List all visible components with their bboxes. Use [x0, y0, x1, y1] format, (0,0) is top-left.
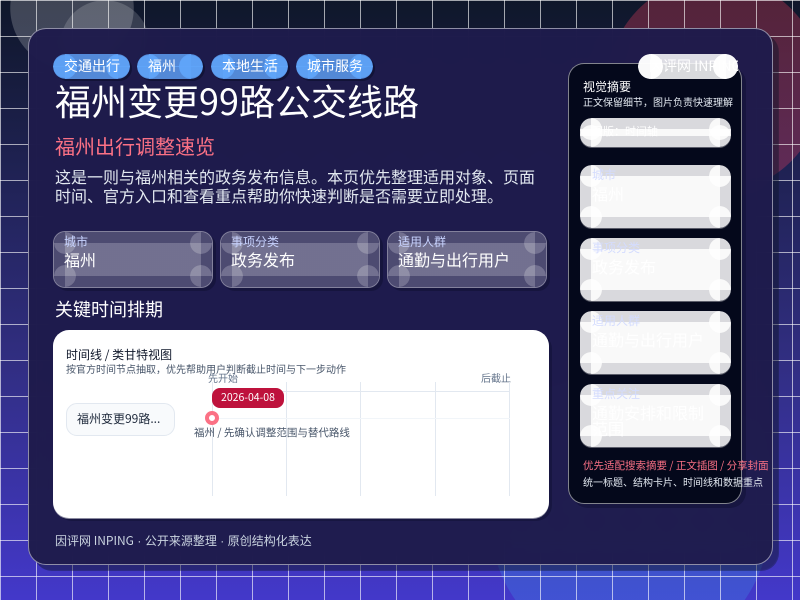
side panel: visual summary	[568, 63, 742, 504]
summary card: 时间轴	[580, 118, 731, 147]
section heading: 关键时间排期	[55, 296, 163, 322]
row label	[66, 403, 175, 436]
tag list	[53, 54, 375, 81]
date pill: 2026-04-08	[221, 390, 275, 405]
summary card: 城市: 福州	[592, 181, 624, 205]
summary card: 重点关注: 通勤安排和限制范围	[592, 400, 704, 440]
summary card: 时间轴: 图版：时间轴	[592, 123, 658, 139]
summary card: 适用人群: 适用人群	[592, 312, 640, 329]
summary card: 重点关注	[580, 384, 731, 447]
row label: 福州变更99路...	[77, 410, 160, 427]
summary card: 事项分类	[580, 238, 731, 301]
summary card: 适用人群: 通勤与出行用户	[592, 327, 704, 351]
summary card: 适用人群	[580, 311, 731, 374]
chart subtitle: 按官方时间节点抽取，优先帮助用户判断截止时间与下一步动作	[66, 361, 346, 376]
description: 时间、官方入口和查看重点帮助你快速判断是否需要立即处理。	[55, 183, 503, 207]
metric card: 事项分类: 政务发布	[231, 247, 295, 271]
tag: 福州: 福州	[148, 56, 176, 76]
metric card: 城市: 福州	[64, 247, 96, 271]
title: 福州变更99路公交线路	[55, 74, 419, 126]
tag: 本地生活: 本地生活	[222, 56, 278, 76]
metric card: 城市: 城市	[64, 233, 88, 250]
metric card: 适用人群: 适用人群	[398, 233, 446, 250]
side note: detail: 统一标题、结构卡片、时间线和数据重点	[583, 474, 763, 489]
description: 这是一则与福州相关的政务发布信息。本页优先整理适用对象、页面	[55, 164, 535, 188]
summary card: 事项分类: 事项分类	[592, 239, 640, 256]
milestone dot	[205, 411, 219, 425]
metric card: 城市	[53, 231, 213, 288]
date pill	[212, 388, 284, 408]
metric card: 事项分类: 事项分类	[231, 233, 279, 250]
chart title: 时间线 / 类甘特视图	[66, 346, 172, 363]
metric card: 适用人群	[387, 231, 547, 288]
metric card: 适用人群: 通勤与出行用户	[398, 247, 510, 271]
axis end label: 后截止	[481, 370, 511, 385]
gantt chart panel	[53, 330, 549, 518]
summary card: 事项分类: 政务发布	[592, 254, 656, 278]
tag: 福州	[137, 54, 203, 79]
side subheading: 正文保留细节，图片负责快速理解	[583, 94, 733, 109]
tag: 城市服务	[296, 54, 373, 79]
tag: 交通出行	[53, 54, 130, 79]
side note: highlight: 优先适配搜索摘要 / 正文插图 / 分享封面	[583, 458, 769, 473]
metric card: 事项分类	[220, 231, 380, 288]
summary card: 重点关注: 重点关注	[592, 385, 640, 402]
summary card: 城市: 城市	[592, 166, 616, 183]
footer: 因评网 INPING · 公开来源整理 · 原创结构化表达	[55, 532, 312, 549]
axis start label: 先开始	[208, 370, 238, 385]
tag: 交通出行: 交通出行	[64, 56, 120, 76]
side heading: 视觉摘要	[583, 78, 631, 95]
description	[55, 164, 535, 207]
summary card: 城市	[580, 165, 731, 228]
tag: 城市服务: 城市服务	[307, 56, 363, 76]
subtitle: 福州出行调整速览	[55, 131, 215, 160]
milestone text: 福州 / 先确认调整范围与替代路线	[194, 425, 350, 440]
tag: 本地生活	[211, 54, 288, 79]
